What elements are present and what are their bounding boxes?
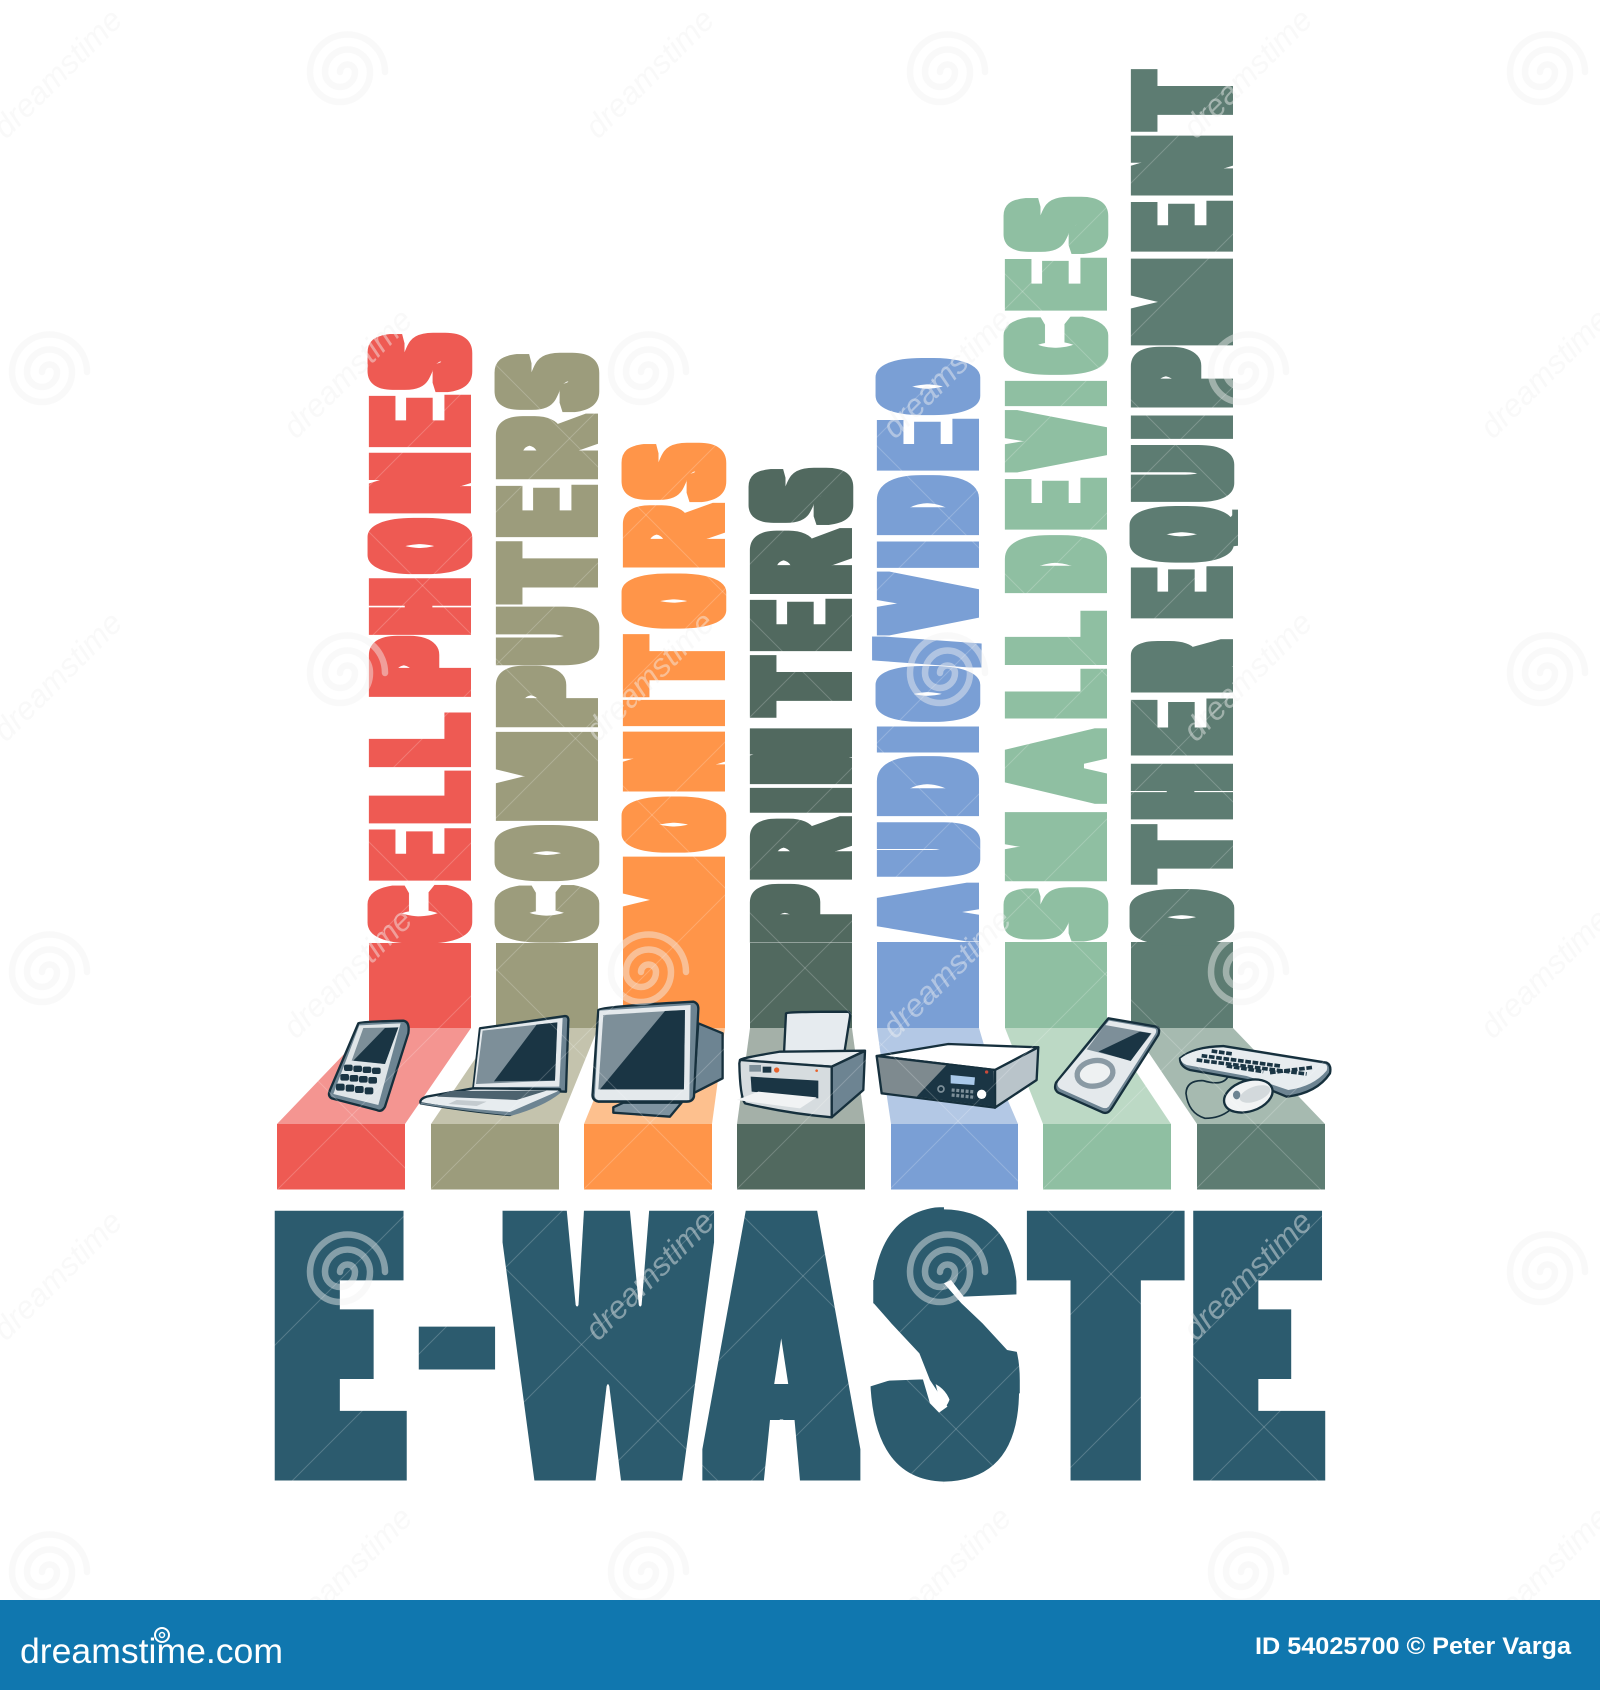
icon: monitor bbox=[593, 1002, 723, 1117]
label: printers: N bbox=[727, 733, 874, 779]
label: cell phones: E bbox=[346, 401, 493, 442]
title: E-WASTE bbox=[285, 1151, 1326, 1539]
label: monitors: S bbox=[600, 449, 747, 495]
label: audio video: D bbox=[854, 481, 1001, 531]
label: other equipment: T bbox=[1108, 832, 1255, 876]
label: cell phones: C bbox=[346, 892, 493, 937]
label: printers: R bbox=[727, 824, 874, 875]
label: printers bbox=[727, 474, 874, 938]
label: printers: E bbox=[727, 605, 874, 646]
label: small devices: D bbox=[982, 541, 1129, 588]
label: small devices: V bbox=[982, 418, 1129, 464]
label: cell phones bbox=[346, 339, 493, 937]
label: audio video bbox=[854, 365, 1001, 934]
label: computers: M bbox=[473, 734, 620, 819]
watermark overlay: dreamstime bbox=[577, 1203, 721, 1347]
watermark overlay: dreamstime bbox=[874, 901, 1018, 1045]
label: computers: U bbox=[473, 612, 620, 660]
bar: other equipment bbox=[1131, 942, 1325, 1190]
label: other equipment: E bbox=[1108, 705, 1255, 751]
label: cell phones: P bbox=[346, 642, 493, 693]
label: printers: R bbox=[727, 536, 874, 590]
watermark overlay: dreamstime bbox=[577, 1, 721, 145]
title: E-WASTE: W bbox=[523, 1151, 695, 1539]
watermark overlay: dreamstime bbox=[1175, 604, 1319, 748]
label: monitors: M bbox=[600, 859, 747, 941]
label: small devices bbox=[982, 203, 1129, 934]
label: other equipment: I bbox=[1108, 422, 1255, 432]
icon: cell phone bbox=[329, 1021, 409, 1111]
label: audio video: U bbox=[854, 828, 1001, 871]
bar: monitors bbox=[584, 920, 725, 1190]
label: computers: C bbox=[473, 892, 620, 936]
label: other equipment: N bbox=[1108, 140, 1255, 191]
label: printers: S bbox=[727, 474, 874, 518]
footer band bbox=[0, 1600, 1600, 1690]
label: cell phones: E bbox=[346, 835, 493, 876]
label: other equipment: E bbox=[1108, 207, 1255, 247]
label: printers: I bbox=[727, 794, 874, 807]
title: E-WASTE: A bbox=[719, 1151, 844, 1539]
label: monitors: O bbox=[600, 803, 747, 846]
label: audio video: A bbox=[854, 890, 1001, 934]
label: other equipment: Q bbox=[1108, 513, 1255, 556]
bar: printers bbox=[737, 943, 865, 1190]
bar: audio video bbox=[877, 942, 1018, 1190]
label: other equipment: U bbox=[1108, 450, 1255, 497]
label: computers bbox=[473, 359, 620, 936]
label: small devices: S bbox=[982, 203, 1129, 247]
label: small devices: C bbox=[982, 324, 1129, 368]
text: O bbox=[854, 365, 1001, 408]
label: monitors: T bbox=[600, 642, 747, 689]
label: small devices: S bbox=[982, 894, 1129, 934]
watermark overlay: dreamstime bbox=[1175, 1203, 1319, 1347]
label: cell phones: H bbox=[346, 583, 493, 630]
label: monitors: O bbox=[600, 580, 747, 622]
title: E-WASTE: E bbox=[1204, 1151, 1310, 1539]
watermark overlay: dreamstime bbox=[275, 901, 419, 1045]
label: audio video: / bbox=[854, 645, 1001, 659]
label: other equipment: R bbox=[1108, 647, 1255, 687]
label: computers: R bbox=[473, 421, 620, 475]
label: monitors: R bbox=[600, 510, 747, 563]
label: computers: P bbox=[473, 672, 620, 723]
label: printers: P bbox=[727, 890, 874, 938]
icon: keyboard and mouse bbox=[1180, 1046, 1330, 1118]
label: monitors bbox=[600, 449, 747, 941]
label: other equipment: T bbox=[1108, 77, 1255, 124]
label: monitors: I bbox=[600, 705, 747, 721]
label: other equipment: E bbox=[1108, 573, 1255, 614]
label: cell phones: O bbox=[346, 525, 493, 567]
title: E-WASTE: T bbox=[1046, 1151, 1166, 1539]
icon: laptop bbox=[420, 1016, 568, 1116]
label: small devices: E bbox=[982, 264, 1129, 306]
label: cell phones: N bbox=[346, 457, 493, 509]
label: computers: E bbox=[473, 491, 620, 532]
label: small devices: L bbox=[982, 619, 1129, 661]
label: computers: S bbox=[473, 359, 620, 405]
label: audio video: V bbox=[854, 580, 1001, 627]
watermark overlay: dreamstime bbox=[874, 1499, 1018, 1643]
watermark overlay: dreamstime bbox=[275, 1499, 419, 1643]
watermark overlay: dreamstime bbox=[874, 301, 1018, 445]
label: audio video: O bbox=[854, 673, 1001, 715]
title: E-WASTE: - bbox=[434, 1284, 480, 1396]
label: audio video: I bbox=[854, 547, 1001, 563]
label: small devices: M bbox=[982, 816, 1129, 877]
label: cell phones: L bbox=[346, 778, 493, 819]
footer logo: dreamstime.com bbox=[20, 1631, 283, 1671]
label: other equipment bbox=[1130, 69, 1238, 942]
label: cell phones: L bbox=[346, 721, 493, 763]
label: printers: T bbox=[727, 663, 874, 710]
label: other equipment: O bbox=[1108, 896, 1255, 938]
label: small devices: L bbox=[982, 676, 1129, 714]
label: computers: T bbox=[473, 549, 620, 596]
label: audio video: I bbox=[854, 732, 1001, 747]
label: computers: O bbox=[473, 832, 620, 874]
icon: printer bbox=[737, 1012, 865, 1117]
label: small devices: E bbox=[982, 484, 1129, 525]
title: E-WASTE: S bbox=[883, 1151, 1006, 1539]
title: E-WASTE: E bbox=[285, 1151, 392, 1539]
label: audio video: E bbox=[854, 425, 1001, 466]
label: other equipment: M bbox=[1108, 261, 1255, 343]
footer credit: ID 54025700 © Peter Varga bbox=[1255, 1633, 1572, 1660]
watermark overlay: dreamstime bbox=[1175, 1, 1319, 145]
icon: media player bbox=[1055, 1018, 1159, 1113]
label: audio video: D bbox=[854, 762, 1001, 812]
label: cell phones: S bbox=[346, 339, 493, 385]
label: small devices: I bbox=[982, 386, 1129, 400]
bar: small devices bbox=[1005, 942, 1171, 1190]
watermark overlay: dreamstime bbox=[275, 301, 419, 445]
label: other equipment: H bbox=[1108, 768, 1255, 815]
label: monitors: N bbox=[600, 736, 747, 787]
bar: cell phones bbox=[277, 943, 471, 1190]
bar: computers bbox=[431, 943, 598, 1190]
icon: audio video receiver bbox=[877, 1044, 1038, 1108]
watermark overlay: dreamstime bbox=[577, 604, 721, 748]
label: small devices: A bbox=[982, 735, 1129, 797]
label: other equipment: P bbox=[1108, 353, 1255, 404]
